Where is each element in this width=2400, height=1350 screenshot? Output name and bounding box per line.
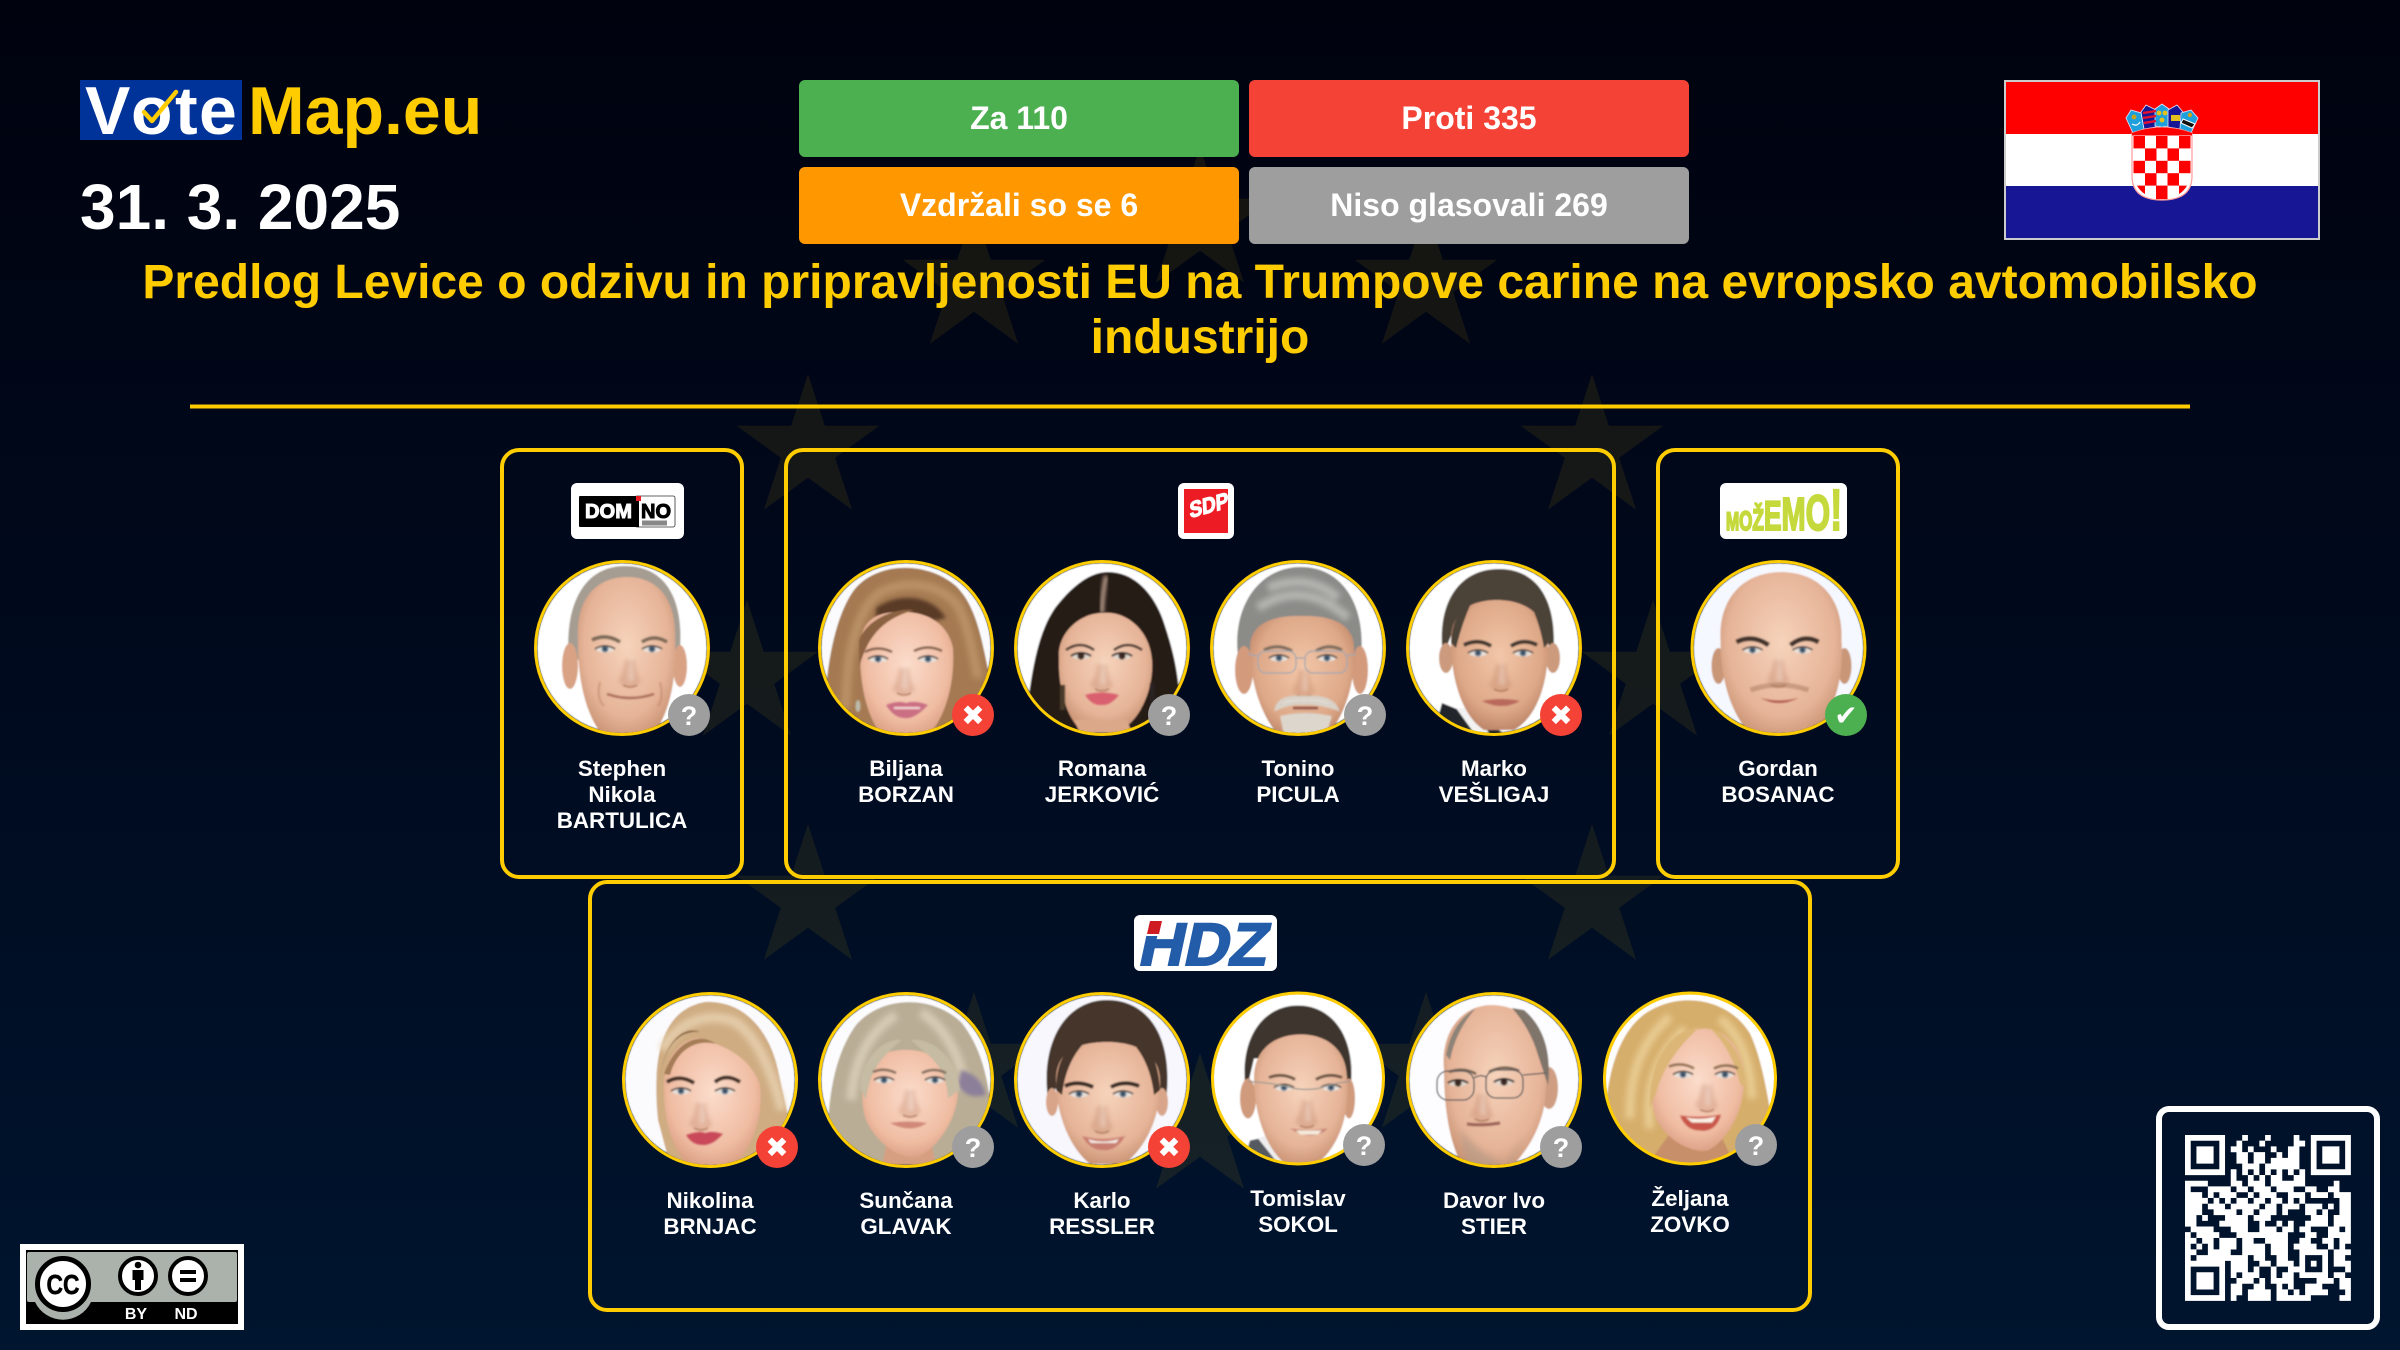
- name: Nikolina Brnjac: Nikolina: [666, 1188, 754, 1213]
- Croatian flag: [2005, 81, 2319, 239]
- portrait: Biljana Borzan: [820, 562, 992, 738]
- date: 31. 3. 2025: [80, 171, 400, 243]
- panel: Možemo: [1658, 450, 1898, 877]
- logo: VoteMap.eu: [80, 73, 482, 149]
- badge: unknown: [1540, 1126, 1582, 1168]
- portrait: Romana Jerković: [1016, 562, 1188, 734]
- panel: HDZ: [590, 882, 1810, 1310]
- name: Stephen Nikola Bartulica: Stephen: [578, 756, 666, 781]
- logo: SDP: [1178, 483, 1234, 539]
- portrait: Nikolina Brnjac: [624, 994, 796, 1167]
- logo: HDZ: HDZ: [1134, 911, 1277, 978]
- portrait: Tonino Picula: [1212, 562, 1384, 740]
- name: Tomislav Sokol: SOKOL: [1258, 1212, 1338, 1237]
- name: Željana Zovko: Željana: [1651, 1186, 1729, 1211]
- panel: DOMiNO: [502, 450, 742, 877]
- button: did not vote: [1249, 167, 1689, 244]
- badge: unknown: [1343, 1124, 1385, 1166]
- name: Nikolina Brnjac: BRNJAC: [663, 1214, 757, 1239]
- name: Romana Jerković: JERKOVIĆ: [1045, 782, 1159, 807]
- badge: against: ✖: [1549, 699, 1573, 732]
- name: Sunčana Glavak: Sunčana: [859, 1188, 953, 1213]
- title: [142, 256, 2258, 364]
- badge: unknown: [952, 1126, 994, 1168]
- badge: for: ✔: [1834, 699, 1858, 732]
- name: Gordan Bosanac: Gordan: [1738, 756, 1818, 781]
- badge: unknown: [668, 694, 710, 736]
- badge: for: [1825, 694, 1867, 736]
- name: Gordan Bosanac: BOSANAC: [1721, 782, 1835, 807]
- badge: against: ✖: [961, 699, 985, 732]
- portrait: Tomislav Sokol: [1212, 993, 1384, 1164]
- name: Stephen Nikola Bartulica: BARTULICA: [557, 808, 687, 833]
- button: abstained: Vzdržali so se 6: [900, 187, 1138, 223]
- name: Biljana Borzan: BORZAN: [858, 782, 954, 807]
- logo: DOMiNO: NO: [641, 501, 671, 523]
- portrait: Marko Vešligaj: [1408, 562, 1580, 734]
- badge: against: ✖: [1157, 1131, 1181, 1164]
- portrait: Željana Zovko: [1604, 993, 1776, 1164]
- portrait: Karlo Ressler: [1016, 994, 1188, 1166]
- button: against: [1249, 80, 1689, 157]
- panel: SDP: [786, 450, 1614, 877]
- logo: Možemo: MOŽEMO!: [1726, 479, 1842, 543]
- logo: DOMiNO: [571, 483, 684, 539]
- logo: DOMiNO: DOM: [585, 501, 632, 523]
- badge: unknown: [1148, 694, 1190, 736]
- badge: against: [1540, 694, 1582, 736]
- button: against: Proti 335: [1401, 100, 1537, 136]
- button: did not vote: Niso glasovali 269: [1330, 187, 1608, 223]
- name: Tomislav Sokol: Tomislav: [1250, 1186, 1346, 1211]
- button: for: [799, 80, 1239, 157]
- creative commons license badge: ND: [174, 1306, 198, 1323]
- title: industrijo: [1091, 311, 1309, 364]
- portrait: Sunčana Glavak: [820, 994, 992, 1166]
- portrait: Davor Ivo Stier: [1408, 994, 1580, 1172]
- name: Tonino Picula: PICULA: [1256, 782, 1340, 807]
- button: abstained: [799, 167, 1239, 244]
- badge: unknown: [1735, 1124, 1777, 1166]
- badge: unknown: ?: [1357, 701, 1373, 731]
- logo: VoteMap.eu: Map.eu: [248, 73, 482, 149]
- creative commons license badge: CC: [46, 1269, 80, 1300]
- name: Karlo Ressler: RESSLER: [1049, 1214, 1155, 1239]
- name: Davor Ivo Stier: STIER: [1461, 1214, 1527, 1239]
- name: Marko Vešligaj: VEŠLIGAJ: [1439, 782, 1549, 807]
- name: Sunčana Glavak: GLAVAK: [860, 1214, 952, 1239]
- name: Davor Ivo Stier: Davor Ivo: [1443, 1188, 1545, 1213]
- title: Predlog Levice o odzivu in pripravljenosti EU na Trumpove carine na evropsko avtomobilsko: [142, 256, 2258, 309]
- EU stars background circle: [676, 147, 1724, 1189]
- name: Karlo Ressler: Karlo: [1073, 1188, 1131, 1213]
- name: Željana Zovko: ZOVKO: [1650, 1212, 1730, 1237]
- button: for: Za 110: [970, 100, 1068, 136]
- name: Stephen Nikola Bartulica: Nikola: [588, 782, 656, 807]
- badge: unknown: ?: [965, 1133, 981, 1163]
- badge: unknown: ?: [1356, 1131, 1372, 1161]
- name: Marko Vešligaj: Marko: [1461, 756, 1527, 781]
- badge: unknown: ?: [1161, 701, 1177, 731]
- name: Biljana Borzan: Biljana: [869, 756, 943, 781]
- creative commons license badge: [20, 1244, 244, 1330]
- badge: unknown: ?: [681, 701, 697, 731]
- badge: against: [756, 1126, 798, 1168]
- badge: unknown: ?: [1553, 1133, 1569, 1163]
- badge: against: [1148, 1126, 1190, 1168]
- creative commons license badge: BY: [125, 1306, 147, 1323]
- badge: unknown: ?: [1748, 1131, 1764, 1161]
- logo: VoteMap.eu: Vote: [85, 73, 237, 149]
- name: Tonino Picula: Tonino: [1262, 756, 1334, 781]
- logo: SDP: SDP: [1189, 487, 1229, 523]
- badge: against: [952, 694, 994, 736]
- badge: against: ✖: [765, 1131, 789, 1164]
- vote totals buttons: [799, 80, 1689, 244]
- portrait: Stephen Nikola Bartulica: [536, 562, 708, 740]
- badge: unknown: [1344, 694, 1386, 736]
- QR code: [2159, 1109, 2377, 1327]
- portrait: Gordan Bosanac: [1692, 562, 1865, 740]
- name: Romana Jerković: Romana: [1058, 756, 1147, 781]
